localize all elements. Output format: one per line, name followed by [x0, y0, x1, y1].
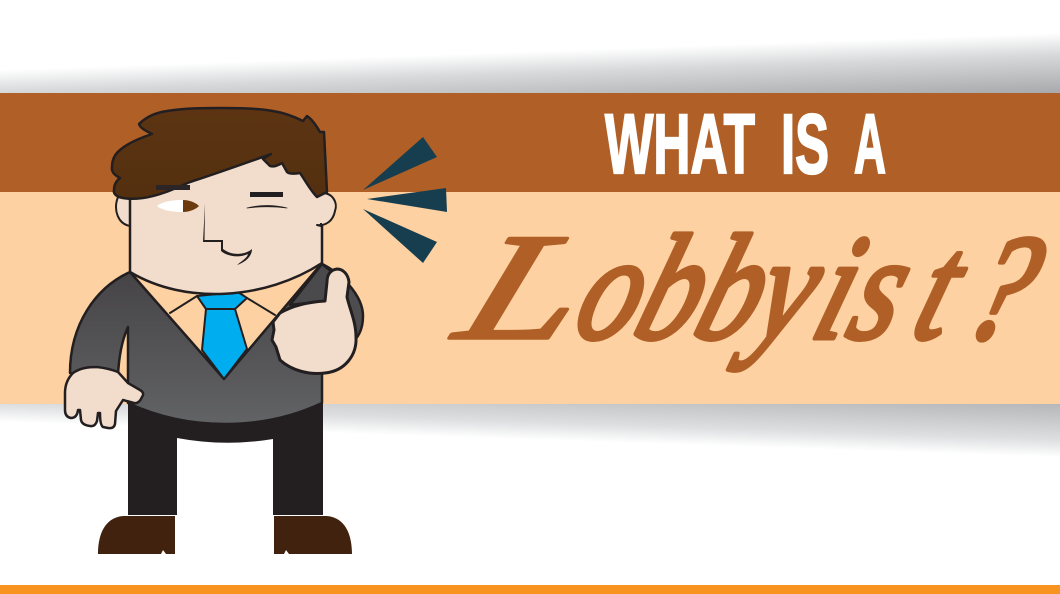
peach title band	[0, 192, 1060, 404]
brown title band	[0, 93, 1060, 192]
heading: what is a: A	[854, 97, 886, 191]
thumbs up hand	[272, 269, 356, 373]
pants	[128, 395, 323, 515]
right shoe	[274, 516, 352, 554]
collar	[130, 250, 322, 379]
heading: what is a: WHAT	[605, 97, 755, 191]
sweater	[70, 263, 322, 424]
footer bar	[0, 585, 1060, 594]
nose and mouth	[203, 203, 252, 265]
hair	[112, 108, 327, 199]
right eye wink	[247, 206, 287, 208]
left ear	[116, 197, 130, 226]
heading: lobbyist: obbyist?	[559, 205, 1060, 371]
speech lines icon	[363, 137, 447, 263]
pointing hand	[65, 367, 143, 428]
tie	[197, 292, 247, 379]
heading: lobbyist: L	[437, 202, 616, 371]
ear join patch	[318, 196, 323, 223]
right ear	[317, 193, 336, 226]
heading: what is a: IS	[781, 97, 829, 191]
left eye	[157, 200, 199, 212]
top shadow	[0, 0, 1060, 93]
character: lobbyist	[65, 108, 363, 554]
lapel	[290, 264, 332, 305]
bottom shadow	[0, 404, 1060, 464]
right eyebrow	[250, 192, 283, 197]
right sleeve	[300, 263, 363, 345]
collar lines	[170, 296, 275, 315]
face	[130, 140, 322, 294]
left shoe	[98, 516, 175, 554]
left eyebrow	[156, 185, 190, 190]
